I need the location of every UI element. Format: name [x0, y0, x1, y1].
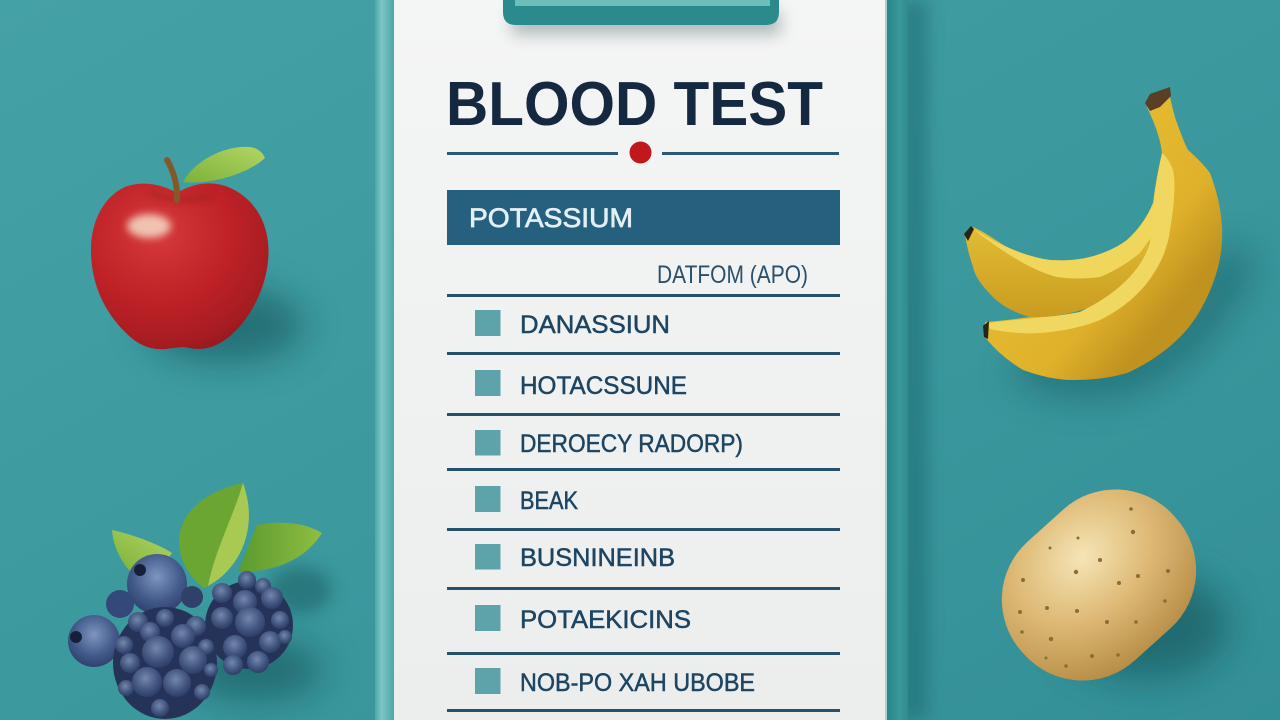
- blackberry back: [205, 571, 293, 675]
- row 7: NOB-PO XAH UBOBE: [520, 669, 755, 697]
- row 4: BEAK: [520, 487, 578, 515]
- row 4: [475, 486, 578, 515]
- icon: potato: [970, 457, 1230, 713]
- row 3: DEROECY RADORP): [520, 430, 743, 458]
- clipboard clip: [503, 0, 779, 25]
- title divider with red dot: [447, 142, 839, 164]
- front banana: [983, 87, 1222, 380]
- section header bar: POTASSIUM: [469, 203, 633, 233]
- blackberry front: [113, 607, 218, 719]
- panel: clipboard: [375, 0, 908, 720]
- row 2: HOTACSSUNE: [520, 372, 687, 400]
- row 1: DANASSIUN: [520, 311, 670, 339]
- icon: berries: [68, 483, 332, 719]
- section header bar: [447, 190, 840, 245]
- row 5: BUSNINEINB: [520, 544, 675, 572]
- back banana: [964, 203, 1165, 317]
- icon: banana: [964, 87, 1240, 380]
- list of test rows: [447, 294, 840, 712]
- title: BLOOD TEST: [446, 70, 823, 139]
- icon: apple: [91, 147, 305, 363]
- row 6: POTAEKICINS: [520, 606, 691, 634]
- berry leaves: [112, 483, 322, 588]
- clipboard shadow: [898, 0, 928, 720]
- column label: DATFOM (APO): [657, 261, 808, 289]
- blueberries: [68, 554, 203, 667]
